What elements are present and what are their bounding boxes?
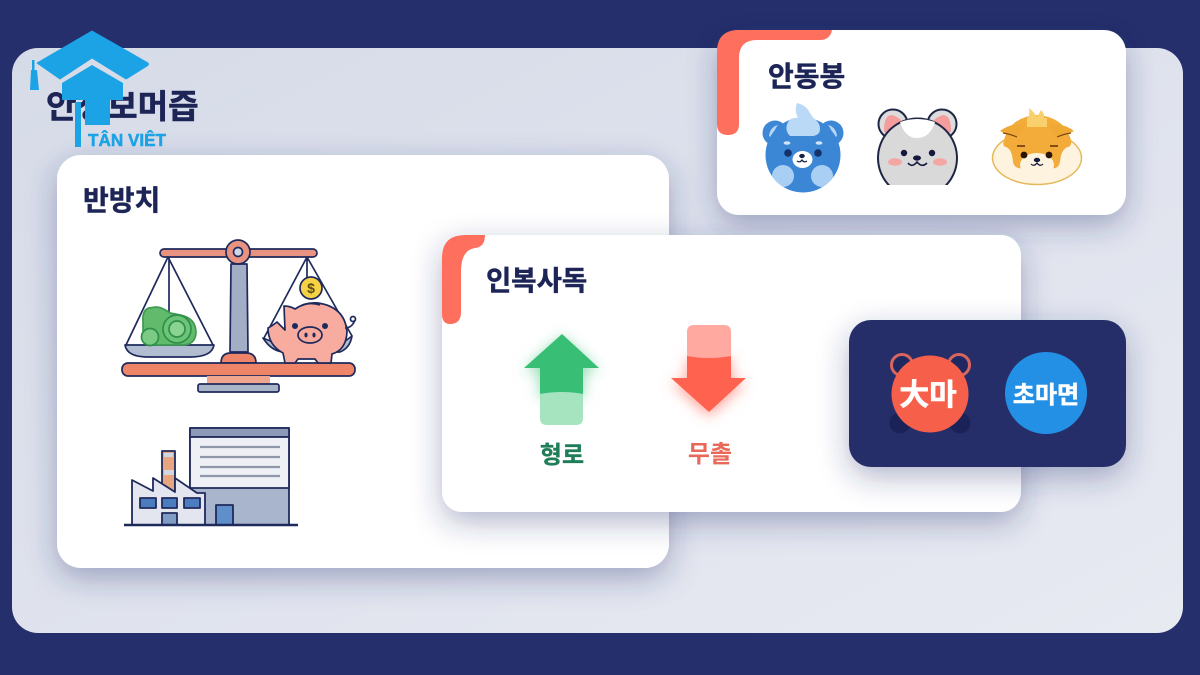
icon: blue bear xyxy=(762,103,844,192)
logo: Tan Viet graduation cap: TÂN VIÊT xyxy=(88,129,166,150)
corner accent xyxy=(717,30,832,135)
badge: red bear 大마: 大마 xyxy=(899,379,957,412)
heading: 반방치: 반방치 xyxy=(83,185,160,216)
corner accent xyxy=(442,235,485,324)
panel: navy badges xyxy=(849,320,1126,467)
label: 형로: 형로 xyxy=(540,442,584,469)
icon: balance scale with cash and piggy bank: $ xyxy=(307,280,315,296)
heading: 안동봉: 안동봉 xyxy=(768,61,845,92)
icon: grey bear xyxy=(877,108,958,185)
badge: blue circle 초마면: 초마면 xyxy=(1013,382,1079,409)
main title: 안성보머즙 xyxy=(46,89,199,126)
icon: red down arrow xyxy=(671,325,746,412)
panel: 반방치 xyxy=(57,155,669,568)
icon: factory and office building xyxy=(124,428,298,525)
badge: blue circle 초마면 xyxy=(1005,352,1087,434)
icon: shiba dog xyxy=(992,108,1082,184)
panel: 인복사독 xyxy=(442,235,1021,512)
logo: Tan Viet graduation cap xyxy=(30,31,166,150)
label: 무촐: 무촐 xyxy=(688,441,732,468)
badge: red bear 大마 xyxy=(890,354,970,434)
icon: green up arrow xyxy=(524,334,599,425)
heading: 인복사독: 인복사독 xyxy=(486,265,587,296)
panel: 안동봉 xyxy=(717,30,1126,215)
icon: balance scale with cash and piggy bank xyxy=(122,240,356,392)
